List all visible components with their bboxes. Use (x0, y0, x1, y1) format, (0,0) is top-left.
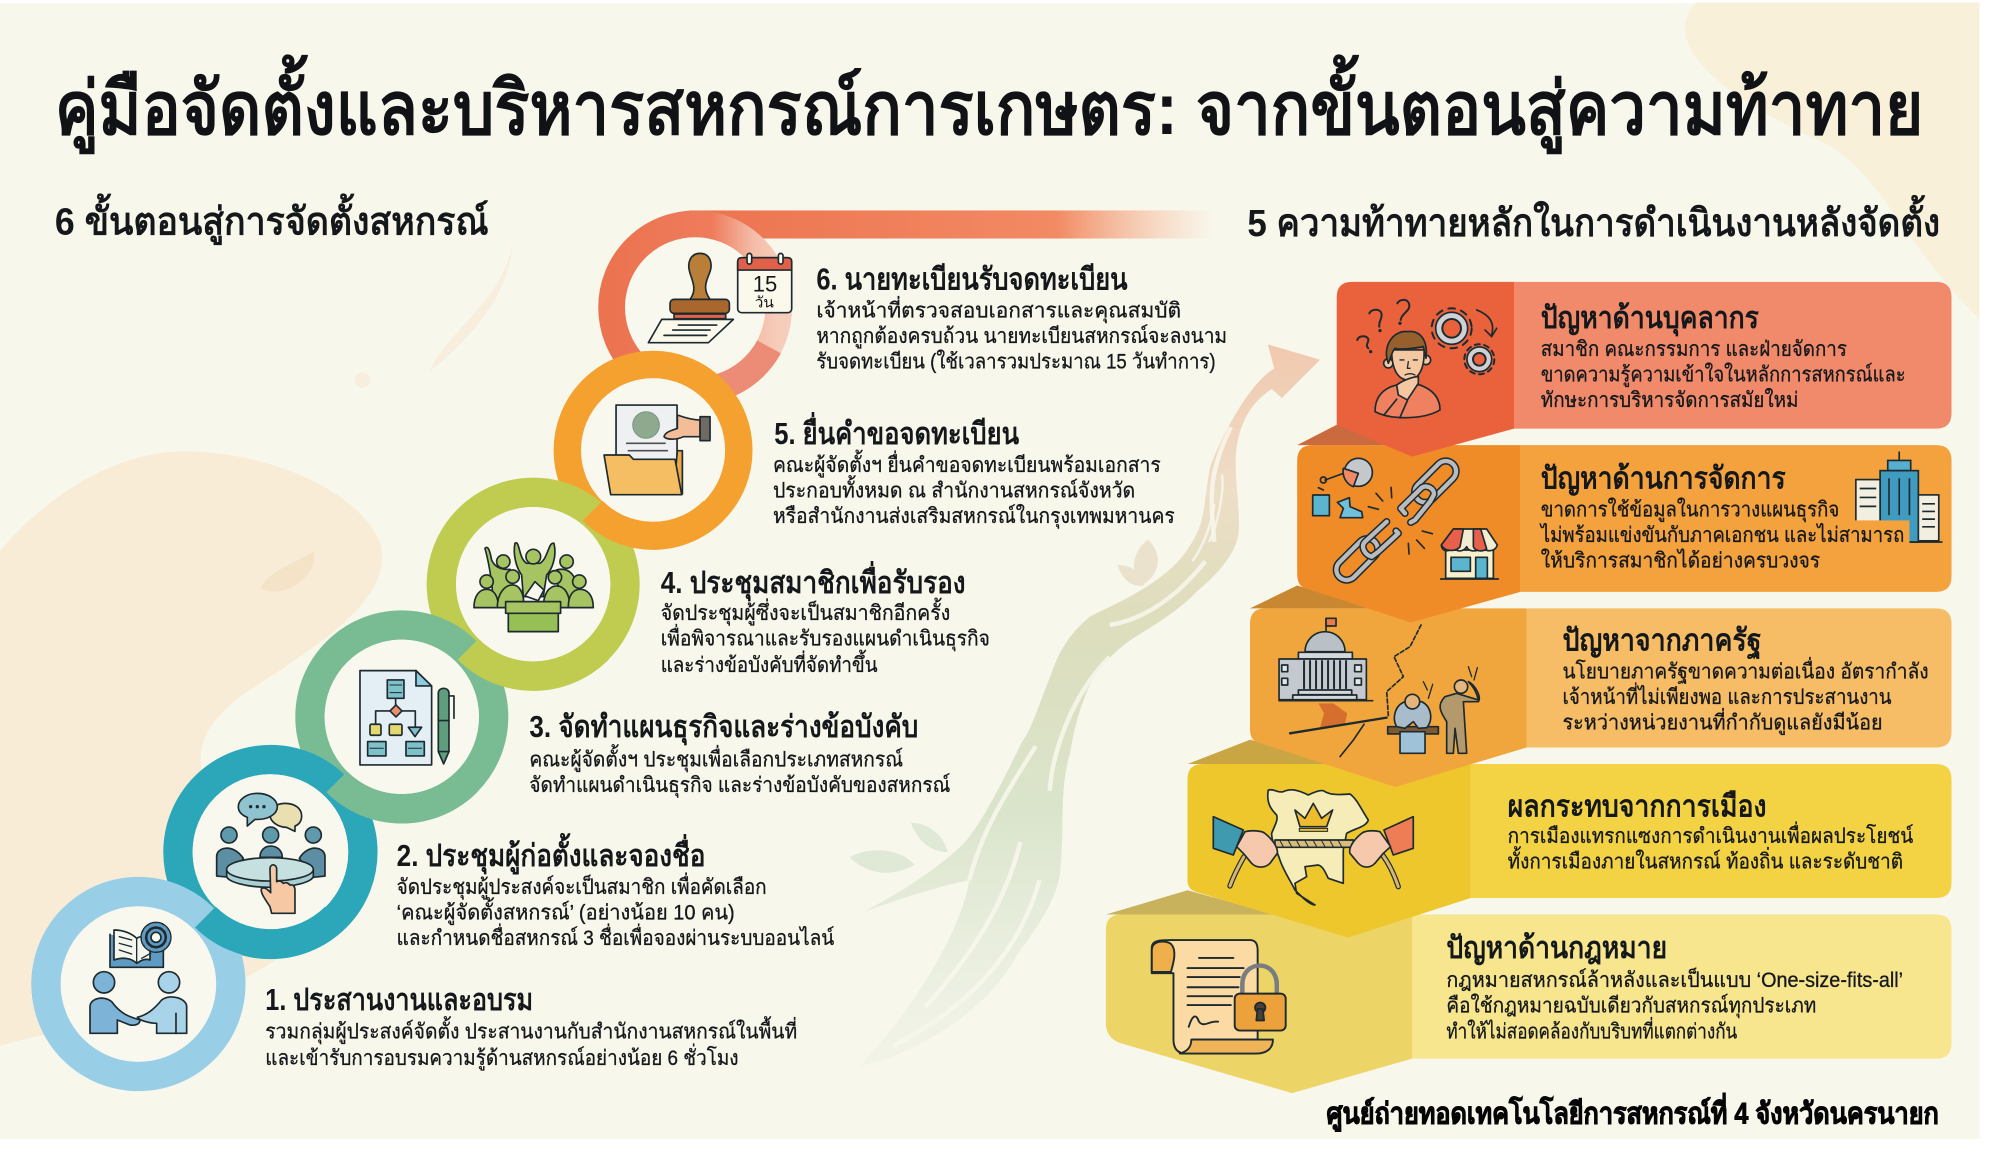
ring 4 (441, 492, 625, 676)
personnel text: สมาชิก คณะกรรมการ และฝ่ายจัดการ (1541, 338, 1847, 361)
personnel text: ขาดความรู้ความเข้าใจในหลักการสหกรณ์และ (1541, 362, 1906, 387)
public sector text: นโยบายภาครัฐขาดความต่อเนื่อง อัตรากำลัง (1562, 657, 1929, 684)
step 5 text: ประกอบทั้งหมด ณ สำนักงานสหกรณ์จังหวัด (773, 475, 1135, 502)
step 6 text (816, 263, 1227, 374)
step 4 text: และร่างข้อบังคับที่จัดทำขึ้น (661, 650, 878, 677)
legal text: ปัญหาด้านกฎหมาย (1446, 931, 1667, 966)
step 4 text: 4. ประชุมสมาชิกเพื่อรับรอง (661, 561, 966, 602)
ring 4 front arc (456, 507, 610, 676)
legal text: คือใช้กฎหมายฉบับเดียวกับสหกรณ์ทุกประเภท (1446, 994, 1816, 1019)
management text: ปัญหาด้านการจัดการ (1541, 462, 1786, 497)
ring 2 front arc (193, 774, 348, 944)
step 6 text: รับจดทะเบียน (ใช้เวลารวมประมาณ 15 วันทำการ) (816, 350, 1216, 374)
public sector text: ปัญหาจากภาครัฐ (1562, 624, 1761, 661)
panel: political impact (1106, 764, 1952, 937)
step 5 text: 5. ยื่นคำขอจดทะเบียน (774, 412, 1019, 451)
political text: ผลกระทบจากการเมือง (1508, 789, 1767, 823)
step 2 text: ‘คณะผู้จัดตั้งสหกรณ์’ (อย่างน้อย 10 คน) (397, 898, 735, 926)
panel: personnel problem (1297, 282, 1952, 457)
step 5 text (773, 412, 1175, 529)
icon: stamp and calendar: วัน (755, 294, 774, 311)
management text: ขาดการใช้ข้อมูลในการวางแผนธุรกิจ (1541, 498, 1839, 523)
icon: document in folder with hand (604, 405, 710, 495)
public sector text (1562, 624, 1929, 736)
icon: stamp and calendar: 15 (753, 271, 777, 296)
political text (1508, 789, 1913, 874)
icon: founders meeting at table (217, 793, 325, 913)
step 1 text: และเข้ารับการอบรมความรู้ด้านสหกรณ์อย่างน้อย 6 ชั่วโมง (265, 1043, 739, 1071)
personnel text: ปัญหาด้านบุคลากร (1541, 301, 1759, 337)
legal text (1446, 931, 1903, 1043)
ring 6 with top band (612, 210, 1214, 391)
step 6 text: 6. นายทะเบียนรับจดทะเบียน (816, 263, 1128, 297)
step 3 text: คณะผู้จัดตั้งฯ ประชุมเพื่อเลือกประเภทสหกรณ์ (529, 745, 903, 773)
step 1 text: 1. ประสานงานและอบรม (265, 983, 533, 1017)
heading: 5 challenges: 5 ความท้าทายหลักในการดำเนินงานหลังจัดตั้ง (1247, 195, 1940, 245)
icon: plan document and pen (360, 671, 454, 765)
panel: management problem (1250, 445, 1952, 622)
icon: stamp and calendar (648, 253, 792, 343)
political text: การเมืองแทรกแซงการดำเนินงานเพื่อผลประโยชน์ (1508, 821, 1913, 848)
legal text: ทำให้ไม่สอดคล้องกับบริบทที่แตกต่างกัน (1446, 1016, 1737, 1043)
ring 1 (46, 892, 231, 1077)
step 4 text (661, 561, 990, 677)
step 3 text (529, 710, 950, 798)
management text (1539, 462, 1904, 573)
ring 3 (310, 625, 494, 809)
step 4 text: เพื่อพิจารณาและรับรองแผนดำเนินธุรกิจ (661, 623, 990, 651)
personnel text: ทักษะการบริหารจัดการสมัยใหม่ (1541, 388, 1798, 412)
step 6 text: หากถูกต้องครบถ้วน นายทะเบียนสหกรณ์จะลงนาม (816, 324, 1227, 349)
step 5 text: คณะผู้จัดตั้งฯ ยื่นคำขอจดทะเบียนพร้อมเอกสาร (773, 450, 1161, 478)
ring 3 front arc (325, 640, 479, 809)
step 3 text: จัดทำแผนดำเนินธุรกิจ และร่างข้อบังคับของสหกรณ์ (529, 773, 950, 798)
step 6 text: เจ้าหน้าที่ตรวจสอบเอกสารและคุณสมบัติ (816, 296, 1181, 324)
step 1 text: รวมกลุ่มผู้ประสงค์จัดตั้ง ประสานงานกับสำนักงานสหกรณ์ในพื้นที่ (265, 1016, 797, 1044)
leaves (1134, 540, 1158, 585)
legal text: กฎหมายสหกรณ์ล้าหลังและเป็นแบบ ‘One-size-fits-all’ (1446, 966, 1903, 992)
icon: office buildings (1849, 452, 1943, 546)
heading: 6 steps: 6 ขั้นตอนสู่การจัดตั้งสหกรณ์ (55, 194, 489, 246)
step 2 text (397, 833, 834, 950)
step 3 text: 3. จัดทำแผนธุรกิจและร่างข้อบังคับ (529, 710, 918, 746)
personnel text (1541, 301, 1906, 412)
step 2 text: จัดประชุมผู้ประสงค์จะเป็นสมาชิก เพื่อคัดเลือก (397, 872, 767, 900)
icon: training and handshake (90, 925, 187, 1033)
icon: confused person with gears (1357, 300, 1497, 418)
political text: ทั้งการเมืองภายในสหกรณ์ ท้องถิ่น และระดับชาติ (1508, 847, 1903, 874)
icon: broken chain and shop (1313, 457, 1498, 584)
icon: scroll and padlock (1152, 940, 1286, 1054)
ring 5 front arc (581, 378, 725, 536)
public sector text: ระหว่างหน่วยงานที่กำกับดูแลยังมีน้อย (1562, 708, 1883, 736)
decorative rising ribbon arrow (849, 344, 1320, 1066)
management text: ไม่พร้อมแข่งขันกับภาคเอกชน และไม่สามารถ (1539, 523, 1904, 547)
ring 2 (178, 760, 363, 945)
panel: legal problem (1106, 915, 1952, 1093)
step 2 text: และกำหนดชื่อสหกรณ์ 3 ชื่อเพื่อจองผ่านระบบออนไลน์ (397, 923, 834, 950)
step 1 text (265, 983, 797, 1071)
step 4 text: จัดประชุมผู้ซึ่งจะเป็นสมาชิกอีกครั้ง (661, 598, 950, 626)
icon: members voting (474, 543, 593, 632)
public sector text: เจ้าหน้าที่ไม่เพียงพอ และการประสานงาน (1562, 682, 1892, 709)
step 2 text: 2. ประชุมผู้ก่อตั้งและจองชื่อ (397, 833, 705, 875)
icon: government building and worried people (1279, 618, 1479, 757)
icon: tug of war over map (1213, 790, 1413, 905)
chain of step rings (46, 210, 1214, 1077)
panel: public sector (1187, 608, 1952, 787)
management text: ให้บริการสมาชิกได้อย่างครบวงจร (1541, 549, 1820, 573)
step 5 text: หรือสำนักงานส่งเสริมสหกรณ์ในกรุงเทพมหานคร (773, 504, 1175, 529)
ring 5 (568, 365, 739, 536)
